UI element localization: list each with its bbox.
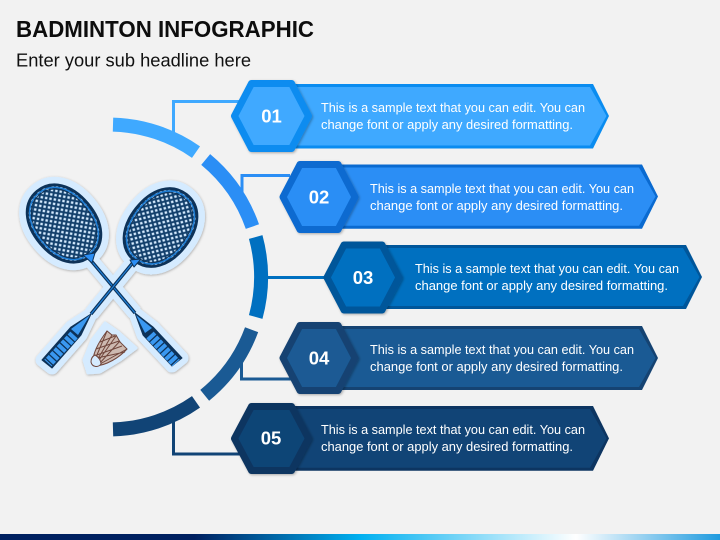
connector lines	[174, 102, 326, 454]
hexagon 03	[327, 245, 399, 310]
banner 03	[378, 245, 702, 309]
left racket head	[13, 171, 115, 276]
panel: item 02	[283, 164, 658, 230]
left racket grip	[135, 313, 182, 366]
number 03: 03	[353, 267, 373, 288]
number 01: 01	[261, 106, 282, 126]
text 04: This is a sample text that you can edit. You can	[370, 342, 634, 357]
icon: crossed badminton rackets and shuttlecock	[12, 170, 212, 373]
footer gradient bar	[0, 534, 720, 540]
text 01	[321, 100, 585, 132]
banner 05	[285, 406, 609, 471]
sticker backing	[12, 170, 212, 373]
text 05	[321, 422, 585, 454]
number 04: 04	[309, 348, 330, 368]
panel: item 05	[234, 406, 609, 471]
hexagon 05	[234, 406, 308, 470]
banner 01	[285, 84, 609, 148]
panel: item 03	[327, 245, 702, 310]
text 02: This is a sample text that you can edit. You can	[370, 181, 634, 196]
number 05: 05	[261, 428, 281, 448]
number 02: 02	[309, 186, 329, 208]
text 03: change font or apply any desired formatting.	[415, 278, 668, 293]
text 01: change font or apply any desired formatting.	[321, 117, 573, 132]
banner 04	[334, 326, 658, 390]
text 03: This is a sample text that you can edit. You can	[415, 261, 679, 276]
subtitle: Enter your sub headline here	[16, 50, 251, 70]
left racket	[13, 171, 182, 366]
panel: item 04	[283, 326, 658, 390]
text 01: This is a sample text that you can edit. You can	[321, 100, 585, 115]
text 04: change font or apply any desired formatting.	[370, 359, 623, 374]
panel: item 01	[234, 84, 609, 148]
hexagon 01	[234, 84, 308, 148]
right racket shaft	[91, 260, 135, 314]
text 04	[370, 342, 634, 374]
text 02	[370, 181, 634, 213]
hexagon 04	[283, 326, 355, 390]
segmented arc	[113, 125, 261, 429]
title: BADMINTON INFOGRAPHIC	[16, 16, 314, 42]
banner 02	[334, 164, 658, 229]
right racket grip	[42, 314, 91, 368]
right racket	[42, 175, 211, 368]
text 05: This is a sample text that you can edit. You can	[321, 422, 585, 437]
right racket head	[110, 175, 211, 280]
text 02: change font or apply any desired formatting.	[370, 198, 623, 213]
text 03	[415, 261, 679, 293]
text 05: change font or apply any desired formatting.	[321, 439, 573, 454]
left racket shaft	[88, 257, 135, 313]
hexagon 02	[283, 164, 355, 230]
shuttlecock	[91, 331, 127, 366]
